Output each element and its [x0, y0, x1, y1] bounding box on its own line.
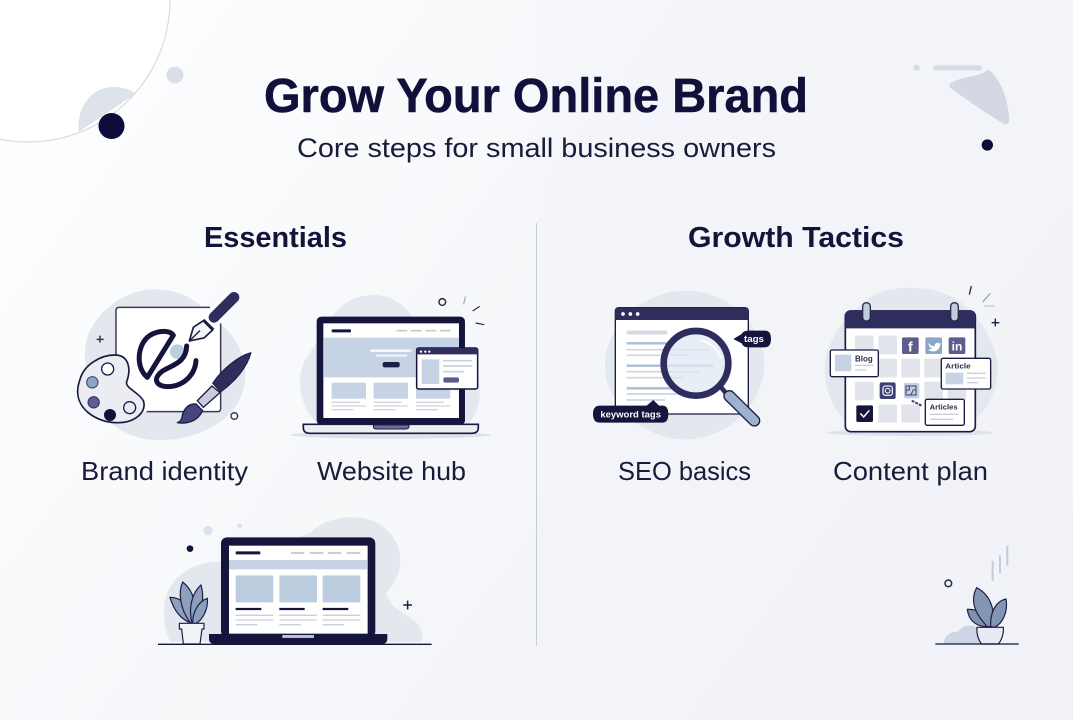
- icon: content plan calendar: Article: [945, 361, 971, 370]
- icon: content plan calendar: f: [908, 338, 913, 354]
- label: Website hub: Website hub: [317, 456, 466, 486]
- icon: content plan calendar: [825, 286, 999, 436]
- icon: content plan calendar: in: [952, 340, 962, 354]
- icon: SEO magnifier window: keyword tags: [600, 410, 661, 420]
- icon: SEO magnifier window: [593, 291, 771, 439]
- heading: Growth Tactics: Growth Tactics: [688, 222, 904, 254]
- label: Brand identity: Brand identity: [81, 456, 248, 486]
- center divider: [536, 223, 537, 646]
- icon: content plan calendar: Articles: [930, 403, 958, 412]
- illustration: small plant: [935, 547, 1019, 644]
- illustration: laptop with plant: [158, 517, 432, 644]
- icon: brand identity: [78, 289, 251, 440]
- icon: website hub laptop: [291, 295, 491, 439]
- heading: Essentials: Essentials: [204, 222, 347, 254]
- decoration: top-right shapes: [914, 65, 1009, 151]
- decoration: top-left arc and dots: [0, 0, 184, 142]
- title: Grow Your Online Brand: [264, 70, 808, 123]
- subtitle: Core steps for small business owners: [297, 133, 776, 163]
- label: Content plan: Content plan: [833, 456, 988, 486]
- icon: content plan calendar: Blog: [855, 354, 873, 363]
- icon: SEO magnifier window: tags: [744, 334, 764, 344]
- label: SEO basics: SEO basics: [618, 456, 751, 486]
